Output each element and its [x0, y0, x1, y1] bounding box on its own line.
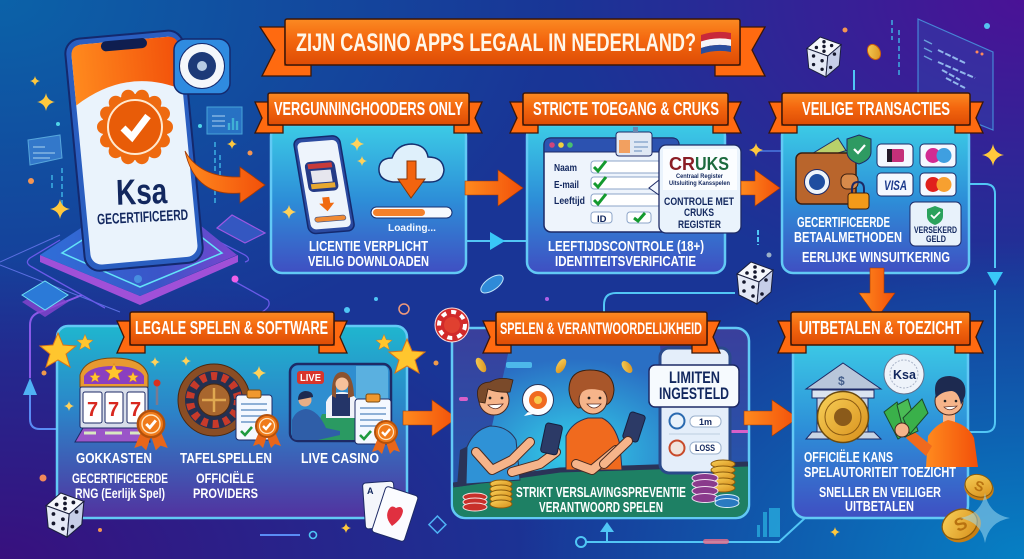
arrow: panel 5 to panel 6 [744, 400, 798, 436]
phone: limits set [649, 348, 739, 473]
padlock [852, 182, 864, 194]
caption: LICENTIE VERPLICHT [309, 238, 428, 255]
icon: Ksa app badge [174, 39, 230, 94]
person: woman in orange shirt [566, 370, 646, 470]
title banner [260, 19, 765, 76]
phone: limits set: LOSS [695, 443, 715, 453]
callout: cruks register: Uitsluiting Kansspelen [669, 180, 730, 187]
game captions: OFFICIËLE [196, 470, 254, 486]
caption: LEEFTIJDSCONTROLE (18+) [548, 238, 704, 255]
arrow: panel 3 down to panel 6 [859, 268, 895, 318]
loading label: Loading... [388, 222, 436, 234]
registration form window [544, 138, 679, 232]
certificate seal [102, 94, 168, 160]
icon: Dutch flag [701, 32, 731, 54]
heading: LEGALE SPELEN & SOFTWARE [135, 318, 328, 338]
floating dashboard right [207, 107, 242, 134]
gecertificeerd text: GECERTIFICEERD [97, 207, 189, 228]
icon: bank with gold seal [806, 363, 881, 442]
game captions: GECERTIFICEERDE [72, 470, 168, 486]
caption [516, 485, 686, 516]
caption: BETAALMETHODEN [794, 229, 902, 246]
arrow: panel 4 to panel 5 [403, 400, 457, 436]
game captions: PROVIDERS [193, 485, 258, 501]
shield [847, 135, 871, 164]
panel: legale spelen & software [57, 312, 407, 518]
caption: IDENTITEITSVERIFICATIE [555, 253, 696, 270]
caption: OFFICIËLE KANS [804, 449, 893, 466]
callout: cruks register: REGISTER [678, 219, 721, 231]
caption [804, 449, 956, 515]
caption: GECERTIFICEERDE [797, 214, 890, 231]
stars on panel corners [40, 333, 425, 373]
caption: SNELLER EN VEILIGER [819, 485, 941, 501]
callout: cruks register: CR [669, 154, 695, 174]
callout: versekerd geld: VERSEKERD [914, 225, 957, 236]
callout: versekerd geld: GELD [926, 234, 946, 245]
game captions: LIVE CASINO [301, 450, 379, 467]
arrow: phone to panel 1 [185, 151, 265, 203]
floating dashboard left [28, 135, 62, 165]
game captions: GOKKASTEN [76, 450, 152, 467]
caption: VERANTWOORD SPELEN [539, 500, 663, 516]
isometric phone platform [0, 215, 269, 332]
registration form window: ID [597, 214, 607, 225]
heading: VERGUNNINGHOODERS ONLY [274, 99, 463, 119]
icon: slot machine: 7 [108, 399, 119, 421]
person: man in blue shirt [457, 378, 563, 487]
panel: veilige transacties [769, 93, 983, 273]
decorative code screen [918, 19, 993, 130]
icon: Ksa seal: Ksa [893, 367, 917, 382]
caption: UITBETALEN [845, 499, 914, 515]
playing cards [362, 481, 419, 542]
phone: limits set: INGESTELD [659, 384, 729, 403]
callout: cruks register: CRUKS [684, 207, 714, 219]
table [453, 466, 748, 518]
phone: limits set: 1m [699, 417, 712, 427]
panel: strikte toegang & cruks [510, 93, 741, 273]
registration form window: E-mail [554, 179, 579, 191]
payment logos: VISA [884, 177, 907, 193]
icon: wallet [796, 135, 871, 209]
limits text: LIMITEN [669, 368, 720, 387]
caption [308, 238, 429, 270]
icon: ID badge [616, 127, 652, 156]
heading: STRICTE TOEGANG & CRUKS [533, 99, 719, 119]
poker chips [435, 42, 883, 342]
playing cards: A [367, 486, 374, 496]
person: man with money [884, 376, 978, 467]
payment logos [877, 144, 956, 196]
progress bar [371, 207, 452, 218]
game captions: TAFELSPELLEN [180, 450, 272, 467]
dice [46, 37, 841, 537]
caption: EERLIJKE WINSUITKERING [802, 249, 950, 266]
callout: cruks register [649, 145, 741, 233]
sparkle bottom right [960, 493, 1010, 543]
chip stacks [463, 460, 739, 511]
icon: slot machine: 7 [87, 399, 98, 421]
icon: roulette wheel with certificate [178, 364, 281, 448]
panel: spelen & verantwoordelijkheid [452, 312, 749, 518]
icon: live casino screen: LIVE [300, 373, 321, 384]
title text: ZIJN CASINO APPS LEGAAL IN NEDERLAND? [296, 29, 696, 57]
game captions [72, 450, 379, 501]
arrow: panel 2 to panel 3 [741, 170, 780, 206]
heading: VEILIGE TRANSACTIES [802, 99, 950, 119]
registration form window: Leeftijd [554, 195, 585, 207]
game captions: RNG (Eerlijk Spel) [75, 485, 165, 501]
icon: bank with gold seal: $ [838, 374, 845, 388]
heading: UITBETALEN & TOEZICHT [799, 318, 962, 338]
icon: small phone downloading [293, 135, 355, 234]
icon: cloud download [379, 144, 444, 198]
icon: Ksa seal [884, 354, 924, 394]
callout: cruks register: Centraal Register [676, 173, 723, 180]
gold coins [937, 471, 998, 548]
callout: cruks register: CONTROLE MET [664, 196, 734, 208]
panel: vergunninghouders only [255, 93, 482, 273]
caption: VEILIG DOWNLOADEN [308, 253, 429, 270]
icon: live casino screen [290, 364, 400, 454]
arrow: panel 1 to panel 2 [465, 170, 523, 206]
panel: uitbetalen & toezicht [778, 312, 983, 518]
registration form window: Naam [554, 162, 577, 174]
light cone background [492, 346, 660, 472]
phone: Ksa gecertificeerd [64, 29, 204, 272]
heading: SPELEN & VERANTWOORDELIJKHEID [500, 319, 702, 338]
speech bubble [522, 384, 554, 416]
caption: SPELAUTORITEIT TOEZICHT [804, 465, 956, 481]
Ksa text: Ksa [115, 170, 169, 213]
decorative bar chart [757, 508, 780, 537]
caption [794, 214, 950, 266]
callout: versekerd geld [910, 202, 961, 246]
caption: STRIKT VERSLAVINGSPREVENTIE [516, 485, 686, 501]
icon: slot machine [75, 358, 168, 450]
caption [548, 238, 704, 270]
icon: slot machine: 7 [130, 399, 141, 421]
callout: cruks register: UKS [695, 154, 729, 174]
